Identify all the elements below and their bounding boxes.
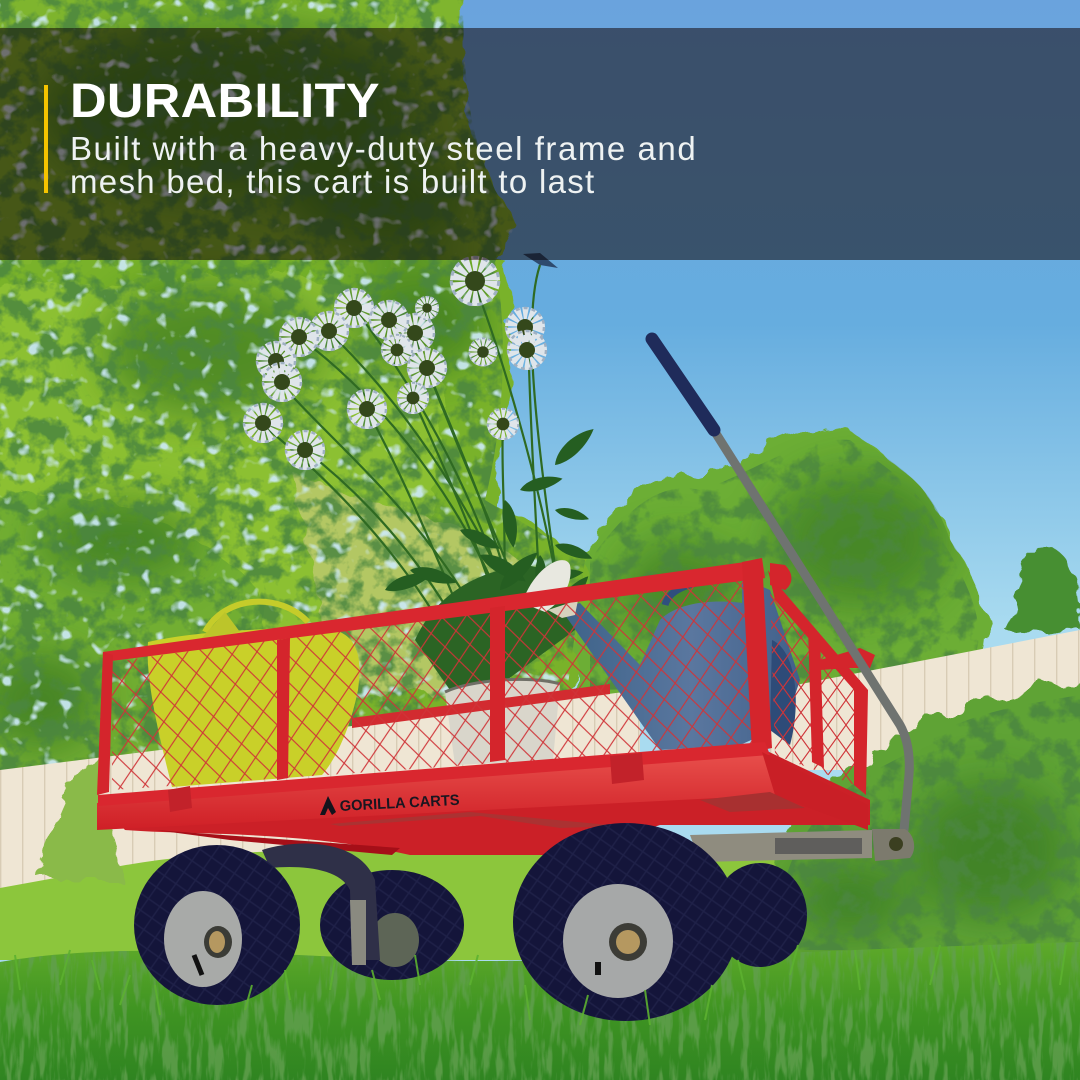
front right wheel bbox=[513, 823, 739, 1021]
header text block bbox=[44, 75, 697, 200]
accent bar bbox=[44, 85, 48, 193]
bushes and lawn bbox=[0, 680, 1080, 1080]
handle bbox=[652, 339, 909, 830]
cargo: flower pot bbox=[445, 679, 560, 765]
cargo: yellow bucket bbox=[148, 602, 359, 787]
description bbox=[70, 130, 697, 200]
description: Built with a heavy-duty steel frame and bbox=[70, 130, 697, 167]
cargo: watering can bbox=[522, 560, 800, 750]
far wheels bbox=[320, 863, 807, 980]
foreground grass blades bbox=[15, 945, 1066, 1025]
wooden fence bbox=[0, 630, 1080, 888]
flowers and plant bbox=[244, 253, 598, 690]
cart side frame bbox=[97, 558, 875, 795]
rear cart rail bbox=[352, 684, 610, 728]
dark header band bbox=[0, 28, 1080, 260]
axle bracket and handle mount bbox=[262, 829, 914, 965]
cart bed bbox=[97, 742, 870, 855]
heading: DURABILITY bbox=[70, 75, 380, 128]
right background trees bbox=[575, 429, 1080, 700]
large left tree bbox=[0, 0, 590, 780]
mesh panels bbox=[112, 572, 860, 790]
front left wheel bbox=[134, 845, 300, 1005]
brand label: GORILLA CARTS bbox=[339, 792, 460, 815]
description: mesh bed, this cart is built to last bbox=[70, 163, 596, 200]
